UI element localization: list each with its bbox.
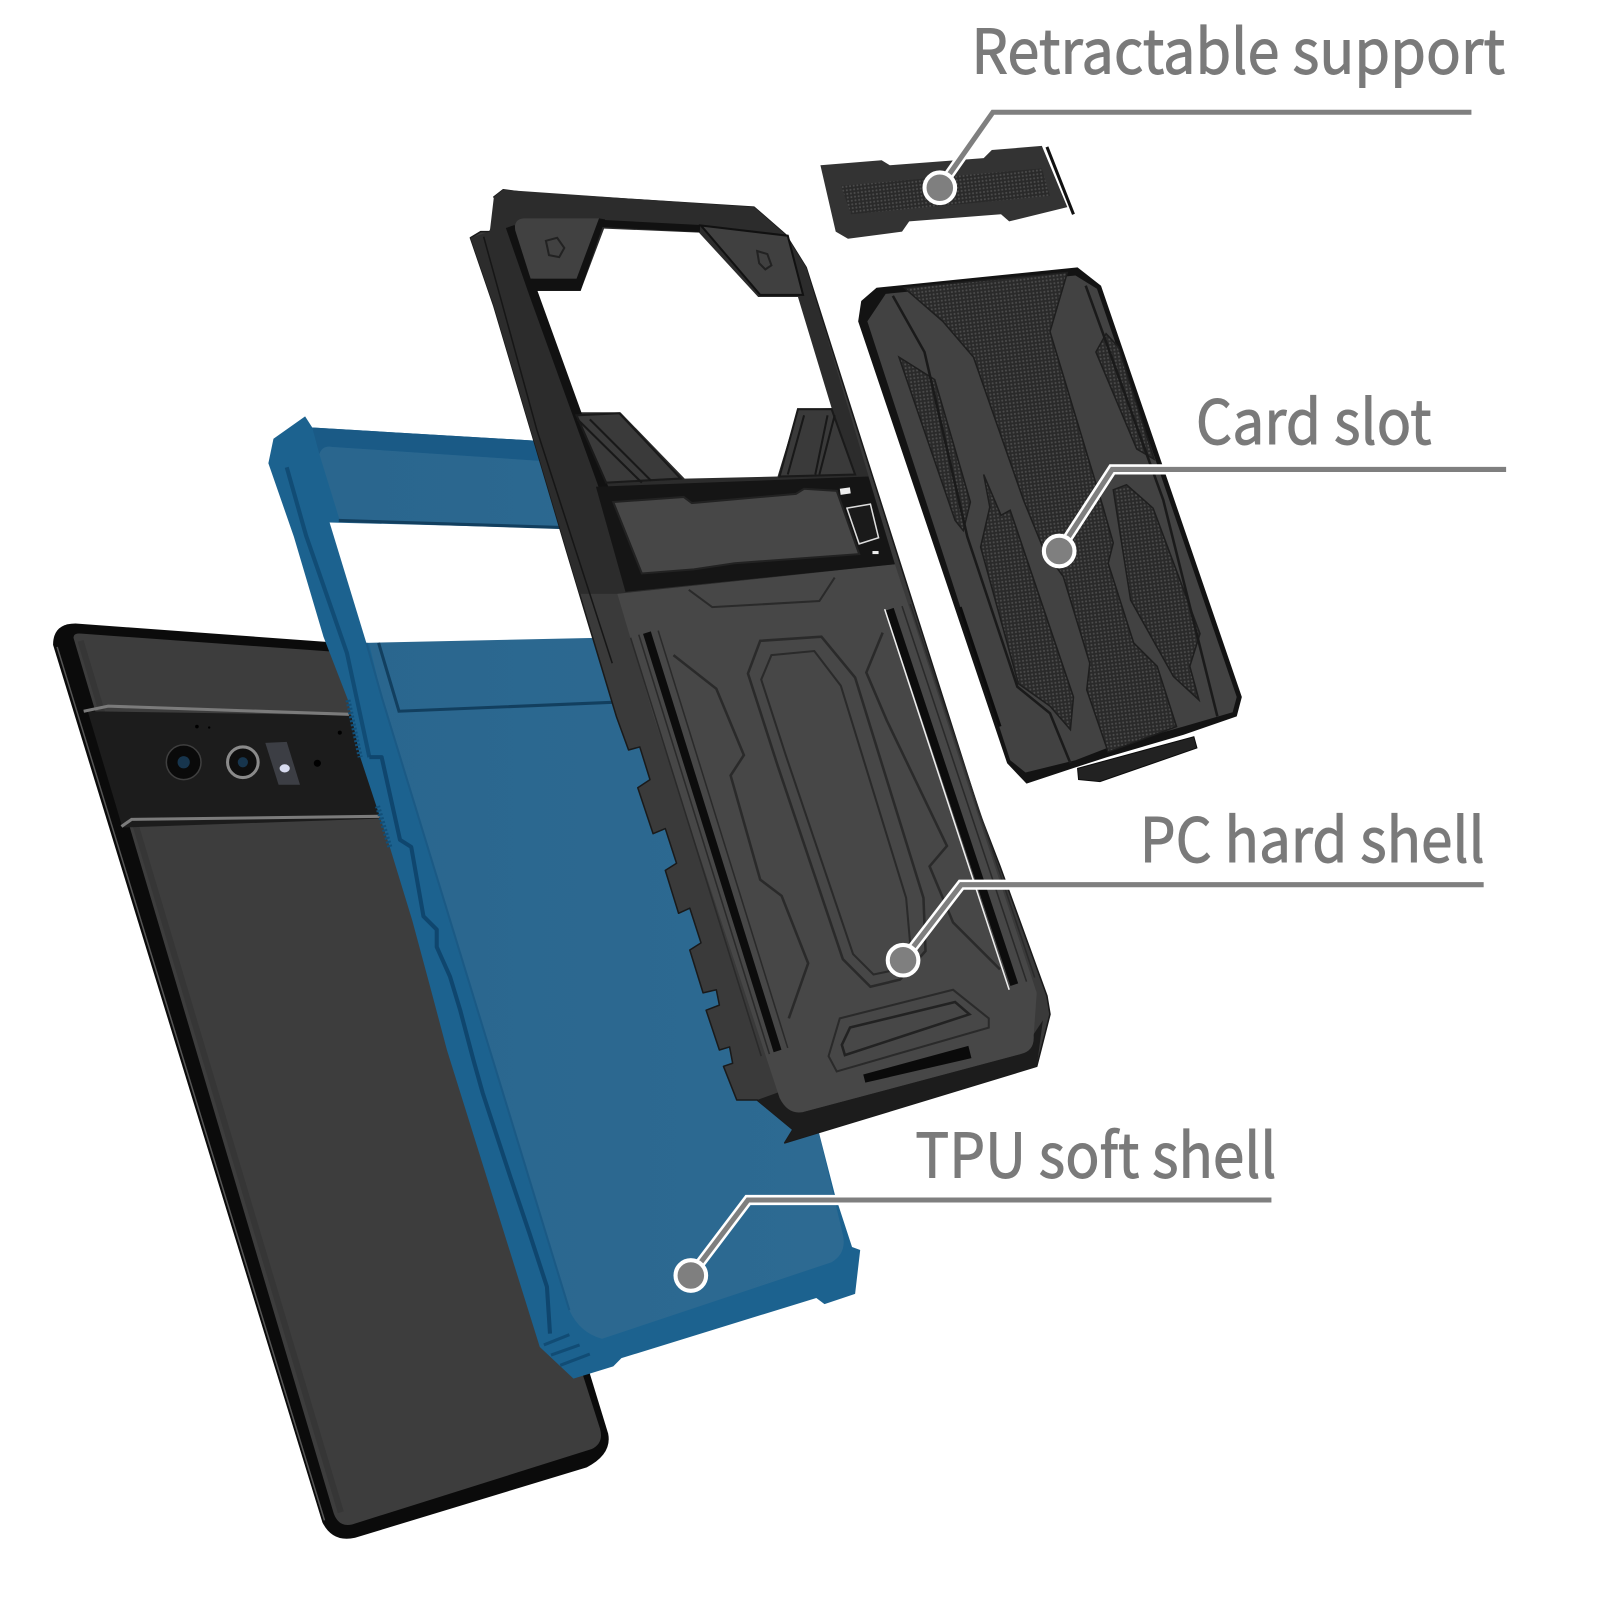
corner block left [515, 218, 599, 279]
panel: TPU soft shell [268, 416, 860, 1379]
label: PC hard shell [888, 791, 1485, 976]
rail inner edge [366, 643, 569, 1310]
slot right highlight [885, 609, 1009, 990]
screw icon left [546, 238, 564, 257]
wing right [866, 633, 1000, 969]
panel: card slot [858, 267, 1242, 784]
hinge left seams [578, 419, 651, 483]
corner block right [701, 226, 803, 295]
slot right channel lines [902, 604, 1035, 982]
window cutout [537, 229, 832, 479]
hinge right seams [788, 415, 835, 474]
label text: Retractable support [971, 2, 1505, 91]
bottom slot [863, 1046, 971, 1083]
lens: wide [228, 747, 258, 778]
phone frame highlight [57, 647, 324, 1520]
camera bar upper trim [84, 706, 349, 714]
label text: PC hard shell [1140, 791, 1485, 880]
label: TPU soft shell [676, 1107, 1277, 1291]
corner block left rim [531, 218, 605, 291]
leader line [903, 885, 1484, 960]
window white cutout [330, 522, 602, 643]
dotted right lower [1113, 485, 1200, 700]
leader line [1059, 469, 1506, 551]
card body [858, 267, 1242, 784]
phone back glass [73, 634, 601, 1525]
label text: TPU soft shell [915, 1107, 1277, 1196]
screw icon right [757, 251, 771, 269]
card face [867, 276, 1237, 772]
card foot [1078, 737, 1197, 782]
callout dot [1044, 536, 1074, 566]
lower pill outer [829, 990, 989, 1071]
label text: Card slot [1196, 373, 1432, 462]
dotted left strip [899, 357, 970, 531]
dotted central [904, 272, 1177, 752]
callout dot [676, 1260, 706, 1291]
card side slit [960, 607, 1000, 727]
top window black band [602, 223, 700, 229]
shell bottom dark edge [757, 1020, 1043, 1143]
callout dot [924, 172, 955, 203]
leader line [691, 1200, 1271, 1276]
lower latch trim [689, 578, 835, 607]
leader halo [940, 112, 1471, 188]
camera bar [88, 711, 386, 828]
wing left [673, 655, 808, 1018]
panel: phone [53, 623, 609, 1539]
label: Retractable support [924, 2, 1505, 203]
inner back face [319, 447, 844, 1339]
support grip [841, 168, 1050, 214]
camera bar lower trim [121, 816, 380, 827]
left frame seam [484, 237, 612, 663]
rail channel upper [287, 467, 369, 757]
panel: PC hard shell [470, 190, 1050, 1143]
shell body [268, 416, 860, 1379]
panel: retractable support [820, 146, 1073, 239]
bottom corner ridges [544, 1335, 590, 1365]
slot left [647, 633, 778, 1051]
dotted right strip [1096, 334, 1154, 459]
leader line [940, 112, 1471, 188]
card right ridge [1086, 286, 1217, 716]
lower recess edge [379, 643, 618, 711]
sensor window [265, 742, 300, 785]
slot left channel lines [631, 631, 788, 1056]
center emboss outer [748, 637, 926, 987]
callout dot [888, 945, 918, 976]
leader halo [903, 885, 1484, 960]
kickstand bar [596, 477, 895, 592]
support body [820, 146, 1067, 239]
phone side band [81, 641, 341, 1512]
center emboss inner [761, 651, 910, 974]
left frame black strip [510, 227, 608, 500]
lower pill inner [842, 1002, 969, 1055]
lens: main [166, 745, 201, 780]
rail channel lower [369, 757, 550, 1334]
card left ridge [893, 296, 1070, 763]
slot right [890, 609, 1014, 985]
small camera dots [195, 725, 342, 767]
leader halo [1059, 469, 1506, 551]
shell lower face [617, 564, 1037, 1112]
shell outer silhouette [470, 190, 1050, 1143]
hinge left [577, 413, 681, 483]
hinge right [780, 409, 855, 477]
phone body [53, 623, 609, 1539]
support tab [1047, 147, 1073, 214]
top recess edge [339, 520, 563, 528]
top frame [470, 190, 895, 594]
leader halo [691, 1200, 1271, 1276]
label: Card slot [1044, 373, 1506, 566]
top band shadow [312, 428, 545, 461]
rail outer grip teeth [348, 700, 390, 847]
dotted left lower [981, 474, 1073, 730]
